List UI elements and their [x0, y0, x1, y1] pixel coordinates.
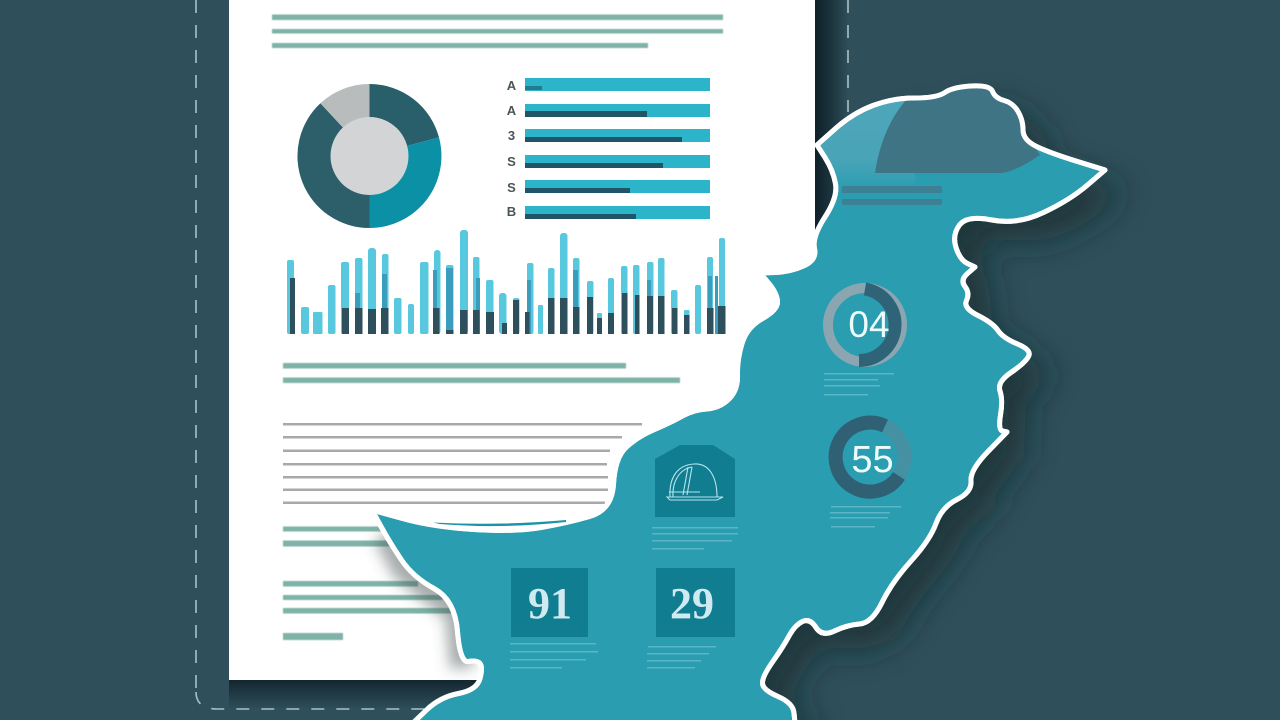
ring stat 04: 04 — [848, 304, 890, 345]
page curl shadow — [385, 535, 462, 668]
stat tile 29 — [656, 568, 735, 637]
horizontal bar chart: S — [507, 154, 516, 169]
horizontal bar chart: A — [507, 103, 517, 118]
stat tile 91 — [511, 568, 588, 637]
icon tile: helmet — [655, 445, 735, 517]
horizontal bar chart — [507, 78, 710, 219]
dashed frame — [196, 0, 848, 709]
horizontal bar chart: S — [507, 180, 516, 195]
tile 91 caption lines — [510, 643, 598, 668]
map north lighter region — [820, 100, 915, 190]
map of Pakistan — [372, 85, 1105, 720]
ring stat 04 — [828, 288, 902, 362]
ring 55 caption lines — [830, 506, 901, 528]
stat tile 29: 29 — [670, 579, 714, 628]
body text lines — [283, 363, 680, 383]
helmet caption lines — [652, 527, 738, 550]
stat tile 91: 91 — [528, 579, 572, 628]
ring stat 55: 55 — [851, 439, 894, 481]
horizontal bar chart: 3 — [508, 128, 515, 143]
icon: helmet outline — [667, 464, 723, 500]
ring stat 55 — [836, 422, 904, 492]
map north dark cap — [875, 85, 1040, 173]
tile 29 caption lines — [647, 646, 716, 668]
map outline over north region — [372, 86, 1105, 720]
ring 04 caption lines — [824, 373, 894, 396]
column chart — [287, 230, 726, 334]
map north text bars — [842, 186, 942, 205]
paper side shadow — [815, 0, 849, 240]
horizontal bar chart: A — [507, 78, 517, 93]
report paper — [229, 0, 830, 680]
header text lines — [272, 14, 723, 48]
infographic: report and map — [195, 0, 1130, 720]
map drop shadow — [396, 106, 1129, 720]
paper bottom shadow — [229, 680, 489, 710]
lower text lines — [283, 526, 455, 640]
horizontal bar chart: B — [507, 204, 516, 219]
donut chart — [297, 84, 441, 228]
coast teal sliver — [433, 520, 566, 526]
gray text lines — [283, 423, 642, 504]
